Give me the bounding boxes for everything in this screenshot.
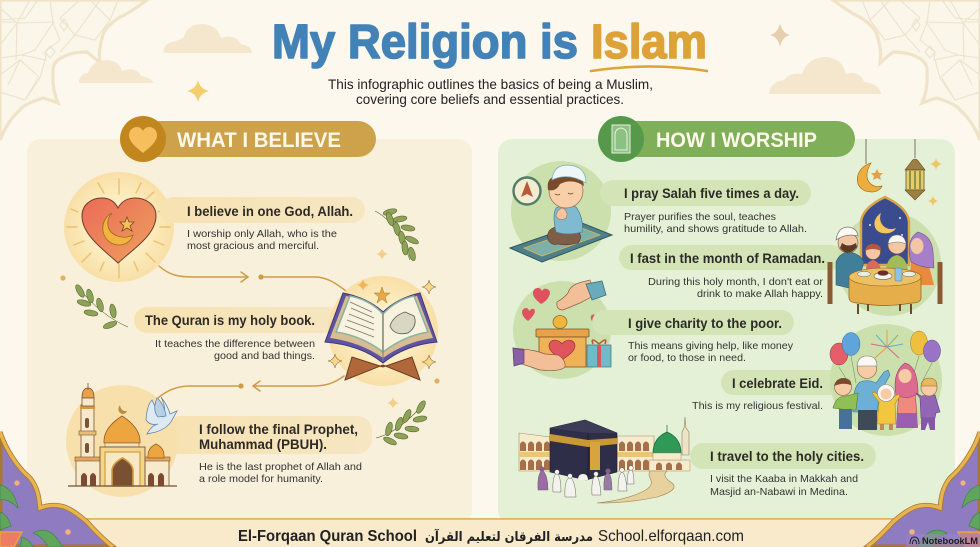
item: Quran: It teaches the difference between [155, 338, 315, 350]
item: one God: I believe in one God, Allah. [187, 203, 353, 219]
icon: olive branch left [74, 283, 128, 330]
item: charity: I give charity to the poor. [628, 315, 782, 331]
heading: what I believe [120, 116, 376, 162]
bottom-right floral corner [867, 432, 980, 547]
subtitle: covering core beliefs and essential practices. [356, 91, 624, 107]
item: Quran: good and bad things. [214, 350, 315, 362]
item: Prophet: a role model for humanity. [199, 473, 323, 485]
item: one God [160, 197, 365, 252]
title: Islam [591, 16, 707, 69]
heading: how I worship: HOW I WORSHIP [656, 129, 817, 152]
item: Prophet: He is the last prophet of Allah and [199, 461, 362, 473]
icon: hanging crescent and lantern [857, 139, 942, 206]
item: Quran: The Quran is my holy book. [145, 312, 315, 328]
item: Eid: I celebrate Eid. [732, 375, 823, 391]
icon: praying boy on mat [510, 161, 612, 262]
item: one God: most gracious and merciful. [187, 240, 319, 252]
item: Eid [692, 370, 851, 412]
top-right lattice corner [833, 0, 980, 140]
subtitle [328, 76, 653, 107]
item: holy cities: I travel to the holy cities. [710, 448, 864, 464]
item: Prophet: Muhammad (PBUH). [199, 436, 327, 452]
icon: compass [514, 178, 540, 204]
item: one God: I worship only Allah, who is the [187, 228, 337, 240]
icon: charity box [513, 280, 611, 379]
title: My Religion is [272, 16, 578, 69]
sparkle yellow [187, 80, 209, 102]
item: Prophet [165, 416, 372, 485]
item: holy cities [690, 443, 876, 498]
item: Ramadan: I fast in the month of Ramadan. [630, 250, 825, 266]
NotebookLM watermark [906, 534, 980, 547]
arrow: Quran to Prophet [158, 376, 440, 398]
icon: Kaaba and holy mosques [519, 417, 690, 503]
item: Salah: Prayer purifies the soul, teaches [624, 211, 776, 223]
icon: mosque [66, 383, 178, 497]
panel: what I believe [27, 116, 472, 524]
item: Salah [600, 180, 811, 235]
cloud right [769, 57, 881, 94]
icon: olive branch lower right [376, 399, 427, 446]
icon: heart with crescent [64, 172, 174, 282]
top-left lattice corner [0, 0, 147, 140]
footer: website: School.elforqaan.com [598, 528, 744, 545]
item: Salah: I pray Salah five times a day. [624, 185, 799, 201]
item: Prophet: I follow the final Prophet, [199, 421, 358, 437]
item: Eid: This is my religious festival. [692, 400, 823, 412]
icon: Eid family with balloons [830, 324, 942, 436]
arrow: God to Quran [60, 266, 346, 291]
subtitle: This infographic outlines the basics of being a Muslim, [328, 76, 653, 92]
cloud left lower [79, 60, 153, 83]
sparkle [387, 397, 399, 409]
NotebookLM watermark: NotebookLM [922, 536, 978, 547]
item: holy cities: I visit the Kaaba in Makkah and [710, 473, 858, 485]
item: holy cities: Masjid an-Nabawi in Medina. [710, 486, 848, 498]
item: Salah: humility, and shows gratitude to Allah. [624, 223, 807, 235]
icon: family iftar [830, 197, 941, 316]
sparkle tan [770, 23, 790, 47]
item: Ramadan [619, 245, 844, 300]
item: charity: or food, to those in need. [628, 352, 746, 364]
item: charity: This means giving help, like money [628, 340, 794, 352]
item: Ramadan: During this holy month, I don't eat or [648, 276, 824, 288]
heading: how I worship [598, 116, 855, 162]
footer band [0, 518, 980, 547]
icon: dove [146, 397, 177, 434]
cloud top left [164, 24, 252, 53]
heading: what I believe: WHAT I BELIEVE [177, 129, 341, 152]
item: charity [592, 310, 794, 364]
panel: how I worship [498, 116, 955, 524]
item: Ramadan: drink to make Allah happy. [697, 288, 823, 300]
item: Quran [134, 307, 349, 362]
bottom-left floral corner [0, 432, 113, 547]
footer: Arabic school name: مدرسة الفرقان لتعليم القرآن [425, 528, 593, 545]
icon: olive branch upper right [375, 207, 420, 262]
footer: school name: El-Forqaan Quran School [238, 528, 417, 545]
sparkle [376, 248, 388, 260]
icon: open Quran on stand [325, 276, 438, 386]
